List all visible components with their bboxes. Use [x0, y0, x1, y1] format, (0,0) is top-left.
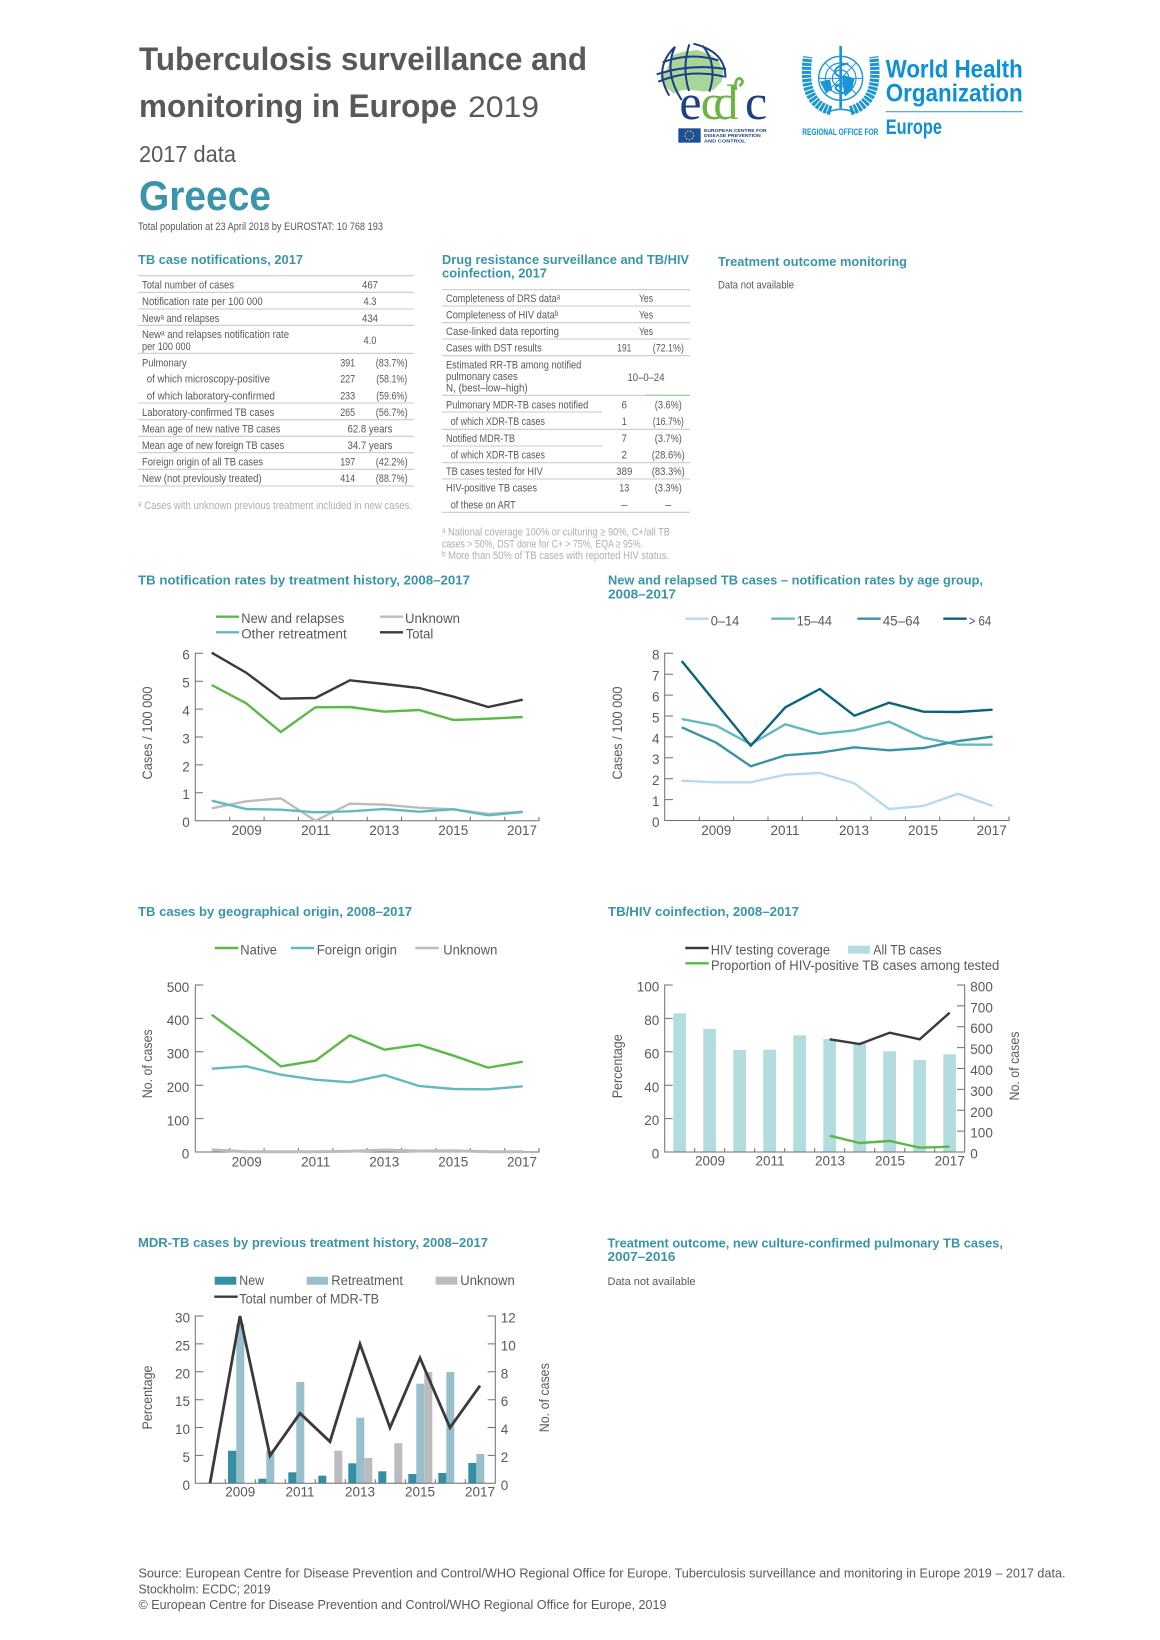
legend: Other retreatment — [241, 627, 347, 642]
line chart — [140, 980, 539, 1170]
line chart — [140, 648, 539, 838]
combined bar and line chart: 0 — [501, 1478, 508, 1493]
legend: 45–64 — [883, 613, 920, 628]
legend: > 64 — [969, 613, 992, 628]
line chart: 2009 — [701, 823, 731, 838]
table rows — [446, 293, 685, 511]
combined bar and line chart: Percentage — [610, 1034, 625, 1098]
table rows: Pulmonary MDR-TB cases notified — [446, 399, 588, 411]
panel: TB notification rates by treatment history — [138, 573, 539, 838]
panel: TB case notifications table — [138, 252, 414, 512]
combined bar and line chart: 300 — [970, 1084, 993, 1099]
heading second line: coinfection, 2017 — [442, 266, 547, 281]
line chart: 2017 — [507, 823, 537, 838]
table rows: – — [665, 499, 672, 511]
table rows: per 100 000 — [142, 341, 191, 353]
line chart: 4 — [652, 732, 660, 746]
combined bar and line chart — [140, 1310, 552, 1500]
combined bar and line chart: 2009 — [695, 1154, 725, 1169]
legend: 15–44 — [797, 613, 832, 628]
table rows: 389 — [616, 466, 632, 478]
ECDC full name — [704, 128, 767, 144]
main title: Tuberculosis surveillance and — [139, 41, 587, 77]
table rows: Total number of cases — [142, 280, 234, 292]
panel: TB/HIV coinfection — [608, 904, 1022, 1169]
table rows: New (not previously treated) — [142, 473, 262, 485]
table rows: (83.3%) — [652, 466, 685, 478]
combined bar and line chart: 60 — [644, 1046, 659, 1062]
footnotes: cases > 50%, DST done for C+ > 75%, EQA ≥ 95%. — [442, 538, 643, 550]
combined bar and line chart: 100 — [637, 980, 659, 994]
line chart: 2011 — [770, 823, 800, 838]
legend: Unknown — [443, 942, 497, 957]
heading: Treatment outcome, new culture-confirmed pulmonary TB cases, — [608, 1235, 1003, 1250]
line chart: 6 — [652, 690, 659, 704]
heading: MDR-TB cases by previous treatment history, 2008–2017 — [138, 1235, 488, 1250]
table rows: 197 — [340, 457, 355, 469]
source note: © European Centre for Disease Prevention and Control/WHO Regional Office for Europe, 2019 — [138, 1598, 667, 1612]
combined bar and line chart: 15 — [175, 1394, 190, 1409]
organisation name second line: Organization — [886, 80, 1023, 108]
table rows: 1 — [622, 416, 627, 428]
table rows: (16.7%) — [653, 416, 684, 428]
combined bar and line chart: 40 — [644, 1080, 659, 1095]
legend: Unknown — [460, 1273, 515, 1288]
combined bar and line chart: 0 — [652, 1146, 659, 1162]
line chart: 2013 — [839, 823, 869, 838]
legend: New and relapses — [241, 611, 345, 626]
table rows: (59.6%) — [376, 390, 407, 402]
table rows: N, (best–low–high) — [446, 383, 528, 395]
table rows: Completeness of HIV dataᵇ — [446, 310, 558, 322]
table rows: 467 — [362, 280, 378, 292]
footnote: ᵃ Cases with unknown previous treatment included in new cases. — [138, 500, 412, 512]
line chart: 0 — [182, 815, 190, 830]
legend: Total — [406, 627, 433, 642]
table rows: (28.6%) — [652, 450, 685, 462]
table rows: Case-linked data reporting — [446, 326, 559, 338]
table rows: Newᵃ and relapses — [142, 313, 220, 325]
line chart: 2009 — [232, 823, 262, 838]
legend: Unknown — [405, 611, 460, 626]
combined bar and line chart: 100 — [970, 1126, 993, 1140]
line chart: 100 — [167, 1114, 189, 1128]
line chart: 6 — [182, 648, 190, 662]
panel: MDR-TB cases by previous treatment history — [138, 1235, 552, 1500]
combined bar and line chart: 500 — [970, 1042, 993, 1057]
legend: Foreign origin — [317, 942, 397, 957]
line chart: Cases / 100 000 — [610, 686, 625, 780]
legend: 0–14 — [711, 613, 740, 628]
icon: EU flag — [678, 128, 701, 143]
table rows: of which laboratory-confirmed — [147, 390, 275, 402]
legend: HIV testing coverage — [711, 942, 830, 957]
table rows: 7 — [622, 433, 627, 445]
line chart: 200 — [167, 1080, 189, 1095]
line chart: 300 — [167, 1046, 189, 1062]
line chart: No. of cases — [140, 1029, 155, 1098]
ECDC full name: EUROPEAN CENTRE FOR — [704, 128, 767, 134]
heading: Treatment outcome monitoring — [718, 254, 907, 269]
table rows — [142, 280, 408, 485]
country name: Greece — [139, 172, 271, 219]
table rows: 233 — [340, 390, 355, 402]
table rows: of which microscopy-positive — [147, 374, 270, 386]
table rows: – — [621, 499, 628, 511]
legend: Total number of MDR-TB — [239, 1291, 379, 1306]
table rows: Foreign origin of all TB cases — [142, 457, 263, 469]
line chart: 2 — [182, 760, 190, 774]
table rows: (42.2%) — [376, 457, 408, 469]
combined bar and line chart: No. of cases — [537, 1363, 552, 1432]
line chart: 0 — [652, 815, 659, 830]
icon: green swirl — [735, 78, 743, 90]
combined bar and line chart: 12 — [501, 1310, 516, 1326]
heading second line: 2008–2017 — [608, 587, 676, 602]
table rows: (88.7%) — [376, 473, 408, 485]
table rows: (3.7%) — [655, 433, 682, 445]
table rows: 191 — [617, 343, 631, 355]
combined bar and line chart: 5 — [182, 1450, 190, 1465]
combined bar and line chart: 2017 — [935, 1154, 965, 1169]
legend — [685, 942, 999, 973]
combined bar and line chart: 2017 — [465, 1485, 495, 1500]
combined bar and line chart: 600 — [970, 1021, 993, 1036]
line chart: 2013 — [369, 823, 399, 838]
combined bar and line chart: 4 — [501, 1422, 509, 1437]
table rows: Yes — [639, 326, 653, 338]
heading: TB case notifications, 2017 — [138, 252, 303, 267]
no data note: Data not available — [718, 280, 794, 292]
table rows: (72.1%) — [653, 343, 684, 355]
combined bar and line chart: 0 — [970, 1146, 978, 1162]
line chart: 2015 — [438, 1155, 468, 1170]
table rows: Mean age of new native TB cases — [142, 424, 281, 436]
ecdc wordmark: ecdc — [679, 74, 767, 130]
main title second line: monitoring in Europe — [139, 88, 457, 124]
table rows: TB cases tested for HIV — [446, 466, 543, 478]
legend — [214, 1273, 515, 1306]
line chart: 2 — [652, 773, 659, 788]
table rows: 10–0–24 — [628, 372, 664, 384]
logo: WHO Europe — [802, 46, 1023, 139]
table rows: 2 — [622, 450, 627, 462]
combined bar and line chart: 20 — [175, 1366, 190, 1382]
line chart: 400 — [167, 1013, 189, 1028]
logo: ECDC — [657, 44, 767, 144]
line chart: 0 — [182, 1146, 189, 1162]
footnotes — [442, 527, 670, 562]
line chart: 1 — [182, 787, 190, 802]
table rows: of which XDR-TB cases — [451, 416, 545, 428]
table rows: (3.3%) — [655, 483, 682, 495]
heading: New and relapsed TB cases – notification rates by age group, — [608, 573, 983, 588]
combined bar and line chart: 2 — [501, 1450, 508, 1465]
table rows: 391 — [340, 358, 355, 370]
table rows: Completeness of DRS dataᵃ — [446, 293, 561, 305]
combined bar and line chart: 25 — [175, 1338, 190, 1354]
table rows: Newᵃ and relapses notification rate — [142, 329, 289, 341]
line chart: 5 — [652, 710, 659, 726]
legend: All TB cases — [873, 942, 942, 957]
combined bar and line chart: 20 — [644, 1113, 659, 1128]
source note: Source: European Centre for Disease Prevention and Control/WHO Regional Office for Europe. Tuberculosis surveillance and monitoring in Europe 2019 – 2017 data. — [138, 1566, 1066, 1580]
combined bar and line chart: 6 — [501, 1394, 508, 1409]
table rows: Mean age of new foreign TB cases — [142, 440, 285, 452]
table rows: 13 — [619, 483, 629, 495]
table rows: Cases with DST results — [446, 343, 542, 355]
line chart: 500 — [167, 980, 189, 995]
panel: TB cases by geographical origin — [138, 904, 539, 1170]
population note: Total population at 23 April 2018 by EUROSTAT: 10 768 193 — [138, 221, 383, 233]
table rows: 4.0 — [364, 335, 376, 347]
source note — [138, 1566, 1066, 1612]
line chart: 2009 — [232, 1155, 262, 1170]
table rows: Yes — [639, 293, 653, 305]
table rows: Pulmonary — [142, 358, 187, 370]
Europe label: Europe — [886, 116, 942, 139]
table rows: Notification rate per 100 000 — [142, 296, 263, 308]
combined bar and line chart: 2015 — [405, 1485, 435, 1500]
icon: WHO emblem — [806, 46, 875, 113]
line chart: 8 — [652, 648, 659, 662]
panel: treatment outcome monitoring — [718, 254, 907, 292]
heading: TB cases by geographical origin, 2008–2017 — [138, 904, 412, 919]
panel: drug resistance surveillance table — [442, 252, 690, 562]
legend: Proportion of HIV-positive TB cases among tested — [711, 958, 999, 973]
line chart: Cases / 100 000 — [140, 686, 155, 780]
legend: New — [239, 1273, 264, 1288]
line chart: 1 — [652, 794, 659, 809]
combined bar and line chart: 2011 — [285, 1485, 315, 1500]
table rows: Yes — [639, 310, 653, 322]
ECDC full name: AND CONTROL — [704, 138, 746, 144]
table rows: Laboratory-confirmed TB cases — [142, 407, 275, 419]
table rows: Notified MDR-TB — [446, 433, 515, 445]
line chart: 4 — [182, 704, 190, 718]
title block — [138, 41, 587, 233]
combined bar and line chart: 800 — [970, 980, 993, 994]
table rows: 6 — [622, 399, 627, 411]
line chart: 2015 — [908, 823, 938, 838]
combined bar and line chart: 2013 — [815, 1154, 845, 1169]
footnotes: ᵃ National coverage 100% or culturing ≥ 90%, C+/all TB — [442, 527, 670, 539]
line chart: 3 — [652, 752, 659, 767]
table rows: 34.7 years — [348, 440, 393, 452]
legend — [215, 942, 497, 957]
combined bar and line chart — [610, 980, 1022, 1169]
footnotes: ᵇ More than 50% of TB cases with reported HIV status. — [442, 550, 669, 562]
table rows: pulmonary cases — [446, 371, 518, 383]
table rows: HIV-positive TB cases — [446, 483, 537, 495]
organisation name: World Health — [886, 55, 1023, 83]
line chart: 2011 — [301, 823, 330, 838]
heading: Drug resistance surveillance and TB/HIV — [442, 252, 689, 267]
line chart: 2017 — [977, 823, 1007, 838]
combined bar and line chart: 2011 — [755, 1154, 785, 1169]
table rows: of these on ART — [451, 499, 516, 511]
heading: TB/HIV coinfection, 2008–2017 — [608, 904, 799, 919]
legend — [685, 613, 992, 628]
line chart: 2015 — [438, 823, 468, 838]
line chart: 2011 — [301, 1155, 330, 1170]
source note: Stockholm: ECDC; 2019 — [138, 1582, 271, 1596]
table rows: Estimated RR-TB among notified — [446, 359, 581, 371]
combined bar and line chart: 2015 — [875, 1154, 905, 1169]
table rows: 414 — [340, 473, 355, 485]
table rows: (58.1%) — [376, 374, 407, 386]
line chart — [610, 648, 1009, 838]
combined bar and line chart: 2013 — [345, 1485, 375, 1500]
heading second line: 2007–2016 — [608, 1249, 676, 1264]
legend — [216, 611, 460, 642]
heading: TB notification rates by treatment history, 2008–2017 — [138, 573, 470, 588]
no data note: Data not available — [608, 1276, 696, 1288]
ECDC full name: DISEASE PREVENTION — [704, 133, 761, 139]
combined bar and line chart: 2009 — [225, 1485, 255, 1500]
table rows: (83.7%) — [376, 358, 408, 370]
combined bar and line chart: 8 — [501, 1366, 508, 1382]
legend: Native — [240, 942, 277, 957]
combined bar and line chart: 30 — [175, 1310, 190, 1326]
data year: 2017 data — [139, 141, 236, 167]
combined bar and line chart: 80 — [644, 1013, 659, 1028]
combined bar and line chart: 10 — [175, 1422, 190, 1437]
line chart: 3 — [182, 732, 190, 746]
line chart: 7 — [652, 668, 659, 684]
legend: Retreatment — [331, 1273, 403, 1288]
combined bar and line chart: 0 — [182, 1478, 190, 1493]
combined bar and line chart: 700 — [970, 1000, 993, 1016]
combined bar and line chart: No. of cases — [1007, 1031, 1022, 1100]
panel: notification rates by age group — [608, 573, 1009, 838]
combined bar and line chart: 400 — [970, 1063, 993, 1078]
table rows: 4.3 — [364, 296, 376, 308]
icon: globe map — [657, 44, 726, 100]
panel: treatment outcome chart placeholder — [608, 1235, 1003, 1288]
combined bar and line chart: 200 — [970, 1105, 993, 1120]
line chart: 2017 — [507, 1155, 537, 1170]
regional office label: REGIONAL OFFICE FOR — [802, 127, 879, 137]
combined bar and line chart: Percentage — [140, 1366, 155, 1430]
table rows: 434 — [362, 313, 378, 325]
table rows: 265 — [340, 407, 355, 419]
table rows: 227 — [340, 374, 355, 386]
table rows: (3.6%) — [655, 399, 682, 411]
line chart: 2013 — [369, 1155, 399, 1170]
table rows: 62.8 years — [348, 424, 393, 436]
table rows: (56.7%) — [376, 407, 408, 419]
combined bar and line chart: 10 — [501, 1338, 516, 1354]
report year: 2019 — [468, 91, 539, 124]
table rows: of which XDR-TB cases — [451, 450, 545, 462]
line chart: 5 — [182, 676, 190, 690]
